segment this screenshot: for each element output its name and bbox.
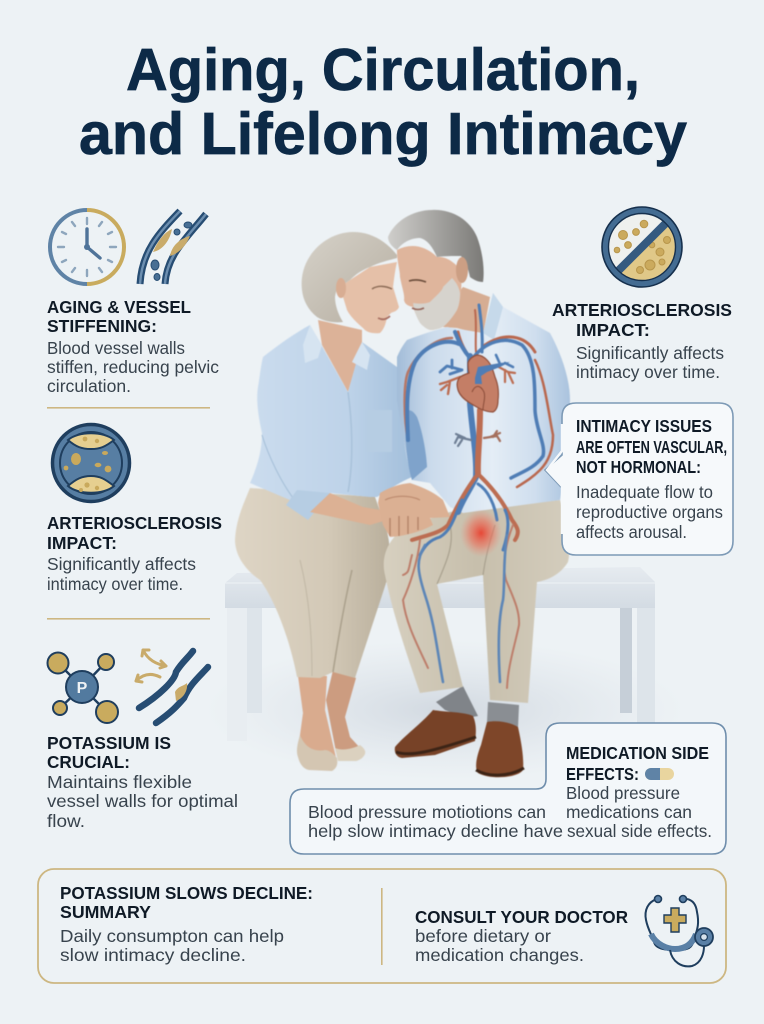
text block: consult your doctor: before dietary or bbox=[415, 926, 551, 946]
text block: arteriosclerosis impact left: ARTERIOSCLEROSIS bbox=[47, 513, 222, 533]
icon: clock bbox=[50, 210, 124, 284]
text block: arteriosclerosis impact left bbox=[47, 513, 222, 594]
callout: intimacy issues are often vascular: Inadequate flow to bbox=[576, 482, 713, 502]
callout: intimacy issues are often vascular: INTIMACY ISSUES bbox=[576, 416, 712, 436]
callout: medication side effects: Blood pressure motiotions can bbox=[308, 802, 546, 822]
text block: potassium is crucial: POTASSIUM IS bbox=[47, 733, 171, 753]
text block: potassium summary: SUMMARY bbox=[60, 902, 151, 922]
callout: intimacy issues are often vascular: NOT HORMONAL: bbox=[576, 457, 701, 477]
text block: potassium is crucial: flow. bbox=[47, 811, 85, 831]
text block: arteriosclerosis impact left: IMPACT: bbox=[47, 533, 117, 553]
text block: potassium summary: Daily consumpton can help bbox=[60, 926, 284, 946]
bench bbox=[225, 567, 655, 741]
floor shadow bbox=[205, 640, 685, 780]
panel: summary and doctor advice bbox=[38, 869, 726, 983]
figure: man bbox=[384, 210, 570, 777]
callout: medication side effects bbox=[290, 723, 726, 854]
callout: medication side effects: sexual side effects. bbox=[567, 821, 712, 841]
text block: potassium is crucial: Maintains flexible bbox=[47, 772, 192, 792]
title: Aging, Circulation, bbox=[126, 37, 640, 103]
icon: flexible vessels with arrows bbox=[136, 650, 208, 723]
diagram: heart bbox=[457, 355, 513, 412]
text block: arteriosclerosis impact left: intimacy over time. bbox=[47, 574, 183, 594]
text block: potassium is crucial bbox=[47, 733, 238, 831]
text block: potassium summary: slow intimacy decline. bbox=[60, 945, 246, 965]
icon: potassium molecule bbox=[48, 652, 118, 723]
text block: potassium is crucial: CRUCIAL: bbox=[47, 752, 130, 772]
text block: potassium is crucial: vessel walls for optimal bbox=[47, 791, 238, 811]
text block: consult your doctor: CONSULT YOUR DOCTOR bbox=[415, 907, 628, 927]
text block: arteriosclerosis impact right: IMPACT: bbox=[576, 320, 650, 340]
text block: arteriosclerosis impact right: intimacy over time. bbox=[576, 362, 720, 382]
figure: woman bbox=[235, 232, 412, 771]
callout: medication side effects: MEDICATION SIDE bbox=[566, 743, 709, 763]
title bbox=[79, 37, 687, 167]
callout: medication side effects: help slow intimacy decline have bbox=[308, 821, 563, 841]
callout: medication side effects: medications can bbox=[566, 802, 692, 822]
text block: potassium summary bbox=[60, 883, 313, 965]
callout: intimacy issues are often vascular: reproductive organs bbox=[576, 502, 723, 522]
text block: potassium summary: POTASSIUM SLOWS DECLINE: bbox=[60, 883, 313, 903]
text block: arteriosclerosis impact right: Significantly affects bbox=[576, 343, 724, 363]
diagram: blood vessels bbox=[403, 305, 553, 688]
text block: arteriosclerosis impact right: ARTERIOSCLEROSIS bbox=[552, 300, 732, 320]
illustration: couple bbox=[235, 210, 570, 777]
text block: arteriosclerosis impact left: Significantly affects bbox=[47, 554, 196, 574]
diagram: pelvic glow bbox=[460, 509, 502, 557]
text block: consult your doctor bbox=[415, 907, 628, 965]
text block: aging and vessel stiffening: circulation. bbox=[47, 376, 131, 396]
callout: intimacy issues are often vascular: affects arousal. bbox=[576, 522, 687, 542]
text block: aging and vessel stiffening bbox=[47, 297, 219, 396]
text block: aging and vessel stiffening: STIFFENING: bbox=[47, 316, 157, 336]
icon: stethoscope bbox=[645, 896, 713, 966]
icon: blocked plaque bbox=[602, 207, 682, 287]
callout: intimacy issues are often vascular bbox=[545, 403, 733, 555]
callout: medication side effects: EFFECTS: bbox=[566, 764, 639, 784]
callout: medication side effects: Blood pressure bbox=[566, 783, 680, 803]
text block: aging and vessel stiffening: AGING & VESSEL bbox=[47, 297, 191, 317]
text block: aging and vessel stiffening: Blood vessel walls bbox=[47, 338, 185, 358]
figure: clasped hands bbox=[378, 483, 450, 537]
text block: aging and vessel stiffening: stiffen, reducing pelvic bbox=[47, 357, 219, 377]
icon: potassium molecule: P bbox=[77, 680, 88, 697]
icon: narrowed artery cross-section bbox=[52, 424, 130, 502]
title: and Lifelong Intimacy bbox=[79, 101, 687, 167]
icon: pill bbox=[645, 768, 674, 780]
text block: consult your doctor: medication changes. bbox=[415, 945, 584, 965]
icon: stiff vessels bbox=[140, 211, 206, 284]
text block: arteriosclerosis impact right bbox=[552, 300, 732, 382]
